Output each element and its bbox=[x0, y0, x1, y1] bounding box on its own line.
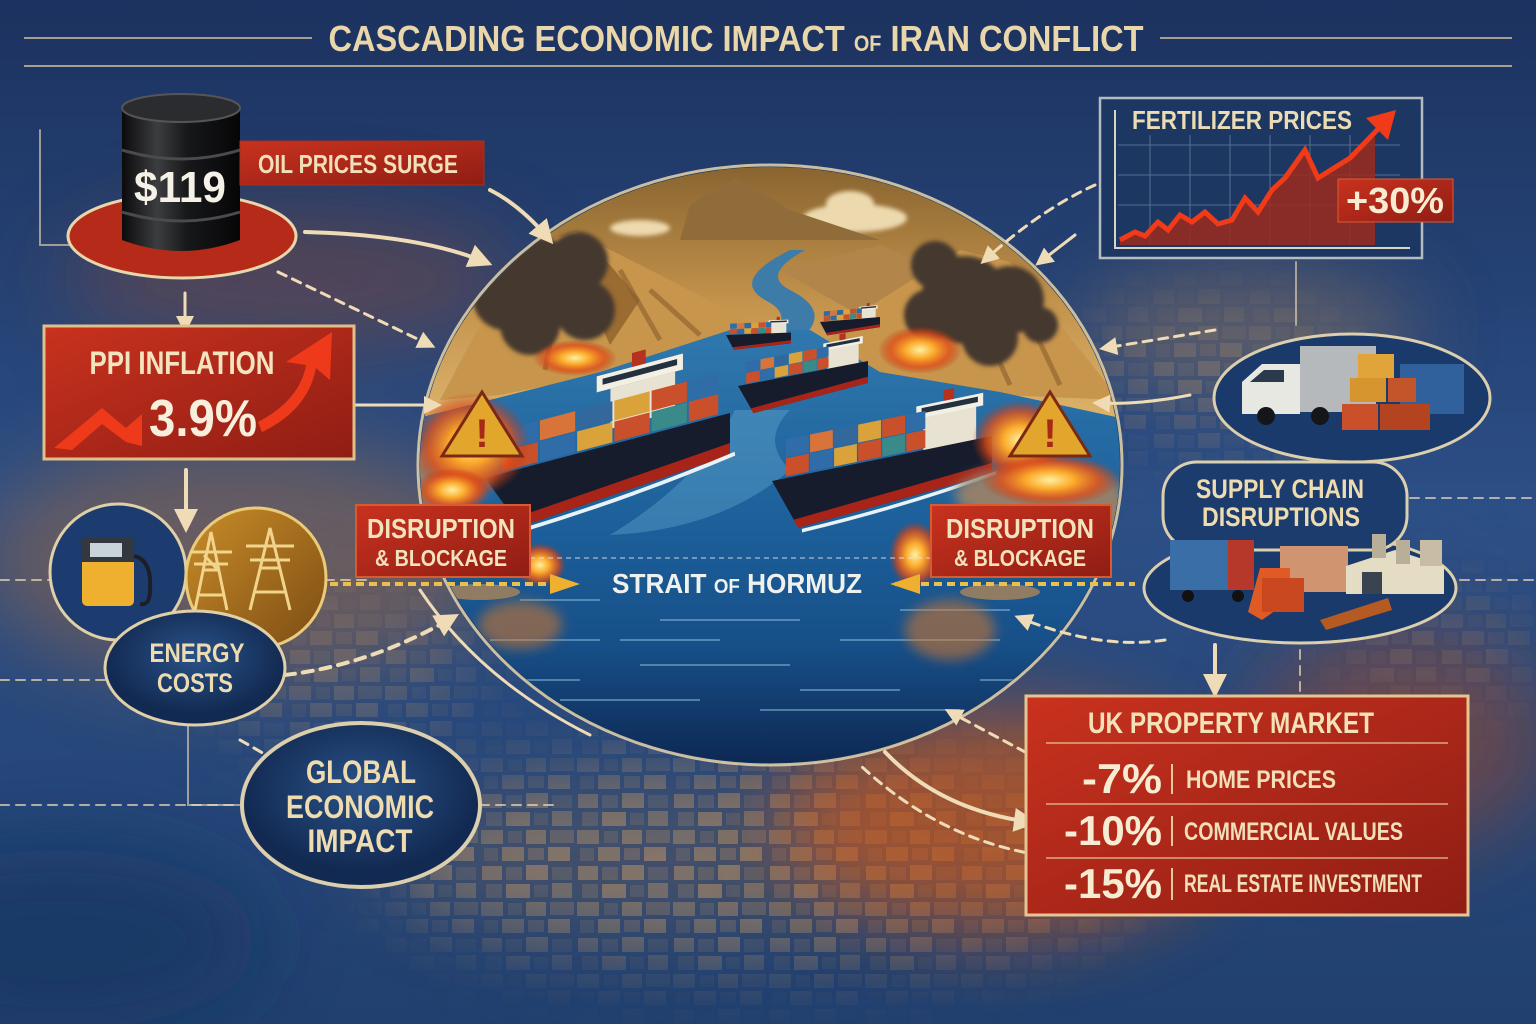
icon: truck and containers bbox=[1214, 334, 1490, 462]
panel: PPI inflation bbox=[44, 326, 354, 459]
oval: energy costs bbox=[105, 611, 285, 725]
panel: PPI inflation: PPI INFLATION bbox=[90, 345, 274, 381]
callout: disruption right bbox=[931, 505, 1111, 577]
callout: disruption left: DISRUPTION bbox=[367, 513, 515, 544]
bubble: supply chain disruptions: SUPPLY CHAIN bbox=[1196, 474, 1364, 504]
central scene: Strait of Hormuz bbox=[370, 160, 1135, 770]
panel: fertilizer prices chart: +30% bbox=[1346, 180, 1444, 221]
mountains bbox=[440, 199, 1112, 400]
panel: fertilizer prices chart bbox=[1100, 98, 1453, 258]
icon: fuel pump bbox=[50, 504, 186, 640]
reflections bbox=[478, 600, 995, 660]
bubble: supply chain disruptions bbox=[1163, 462, 1407, 550]
stat: commercial values bbox=[1064, 807, 1403, 854]
title bbox=[24, 18, 1512, 66]
panel: fertilizer prices chart: FERTILIZER PRICES bbox=[1132, 105, 1352, 135]
warning sign left bbox=[442, 392, 522, 456]
warning sign left: ! bbox=[475, 412, 489, 456]
smoke lower bbox=[420, 440, 1120, 528]
ship: far small right bbox=[820, 302, 880, 336]
stat: real estate investment: -15% bbox=[1064, 860, 1162, 907]
label: strait of hormuz: STRAIT OF HORMUZ bbox=[612, 568, 862, 599]
title: CASCADING ECONOMIC IMPACT OF IRAN CONFLICT bbox=[328, 18, 1144, 59]
panel: PPI inflation: 3.9% bbox=[149, 390, 257, 448]
label: strait of hormuz bbox=[330, 558, 1135, 599]
icon: oil barrel bbox=[68, 94, 296, 278]
oval: energy costs: COSTS bbox=[157, 668, 233, 698]
ship: large right bbox=[772, 379, 996, 537]
oval: global economic impact: ECONOMIC bbox=[286, 789, 434, 825]
fires bbox=[410, 326, 1120, 589]
connector arrows bbox=[0, 130, 1536, 855]
smoke right bbox=[904, 241, 1058, 366]
stat: real estate investment bbox=[1064, 860, 1422, 907]
icon: oil barrel: $119 bbox=[134, 163, 226, 212]
stat: home prices bbox=[1082, 755, 1336, 802]
callout: disruption left bbox=[356, 505, 530, 577]
stat: commercial values: -10% bbox=[1064, 807, 1162, 854]
icon: power pylons bbox=[186, 508, 326, 648]
ship: middle bbox=[738, 329, 868, 416]
banner: oil prices surge: OIL PRICES SURGE bbox=[258, 149, 458, 179]
callout: disruption left: & BLOCKAGE bbox=[375, 545, 507, 571]
rocks bbox=[440, 584, 1040, 600]
ship: far small left bbox=[726, 316, 791, 350]
callout: disruption right: DISRUPTION bbox=[946, 513, 1094, 544]
icon: logistics oval bbox=[1144, 533, 1456, 643]
callout: disruption right: & BLOCKAGE bbox=[954, 545, 1086, 571]
warning sign right: ! bbox=[1043, 412, 1057, 456]
oval: energy costs: ENERGY bbox=[150, 638, 244, 668]
warning sign right bbox=[1010, 392, 1090, 456]
oval: global economic impact: IMPACT bbox=[308, 823, 413, 859]
smoke left bbox=[472, 232, 615, 355]
icon: logistics and factory bbox=[1170, 534, 1444, 630]
panel: UK property market: UK PROPERTY MARKET bbox=[1088, 707, 1374, 740]
stat: commercial values: COMMERCIAL VALUES bbox=[1184, 818, 1403, 846]
sea bbox=[410, 330, 1130, 770]
banner: oil prices surge bbox=[240, 141, 484, 185]
oval: global economic impact bbox=[242, 723, 480, 887]
channel wake bbox=[610, 410, 790, 535]
stat: real estate investment: REAL ESTATE INVESTMENT bbox=[1184, 870, 1422, 898]
stat: home prices: HOME PRICES bbox=[1186, 766, 1336, 794]
stat: home prices: -7% bbox=[1082, 755, 1162, 802]
ship: large left bbox=[486, 349, 736, 530]
sky and clouds bbox=[410, 160, 1130, 420]
panel: UK property market bbox=[1026, 696, 1468, 915]
oval: global economic impact: GLOBAL bbox=[306, 754, 416, 790]
bubble: supply chain disruptions: DISRUPTIONS bbox=[1202, 502, 1360, 532]
